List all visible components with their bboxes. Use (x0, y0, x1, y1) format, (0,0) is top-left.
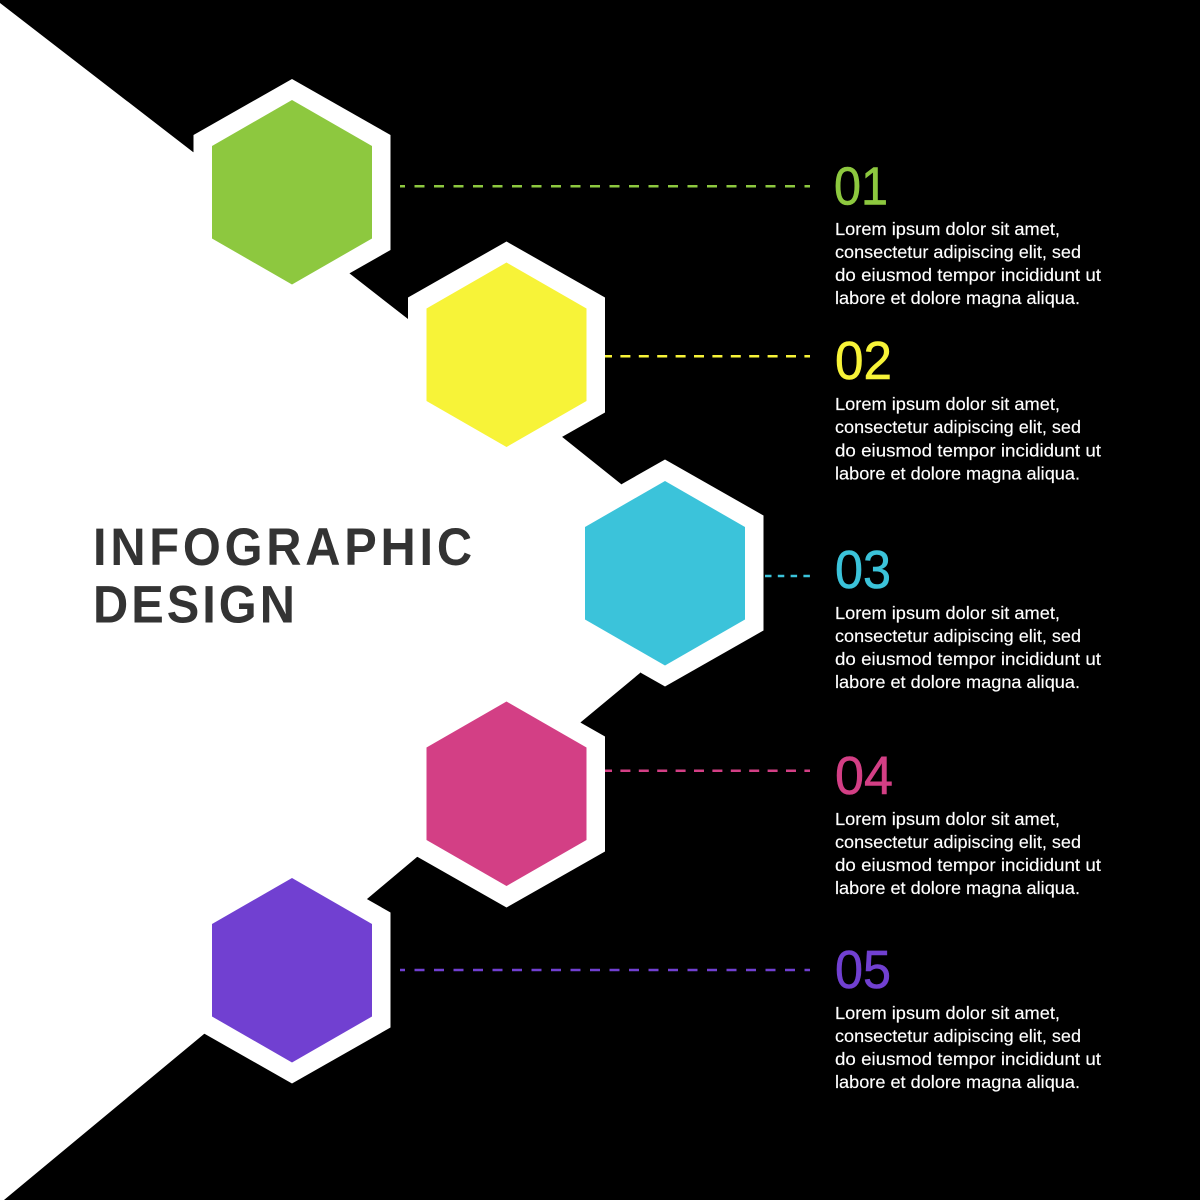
item 01 text: labore et dolore magna aliqua. (835, 288, 1080, 308)
connector line 5 (400, 969, 810, 971)
hexagon 4: pink (426, 702, 586, 886)
item 01 text: do eiusmod tempor incididunt ut (835, 265, 1101, 285)
title (93, 517, 472, 634)
item 04 text: 04 (835, 746, 893, 806)
item 04 text: Lorem ipsum dolor sit amet, (835, 809, 1060, 829)
item 03 text: labore et dolore magna aliqua. (835, 672, 1080, 692)
item 02 text: consectetur adipiscing elit, sed (835, 417, 1081, 437)
item 04 text: do eiusmod tempor incididunt ut (835, 855, 1101, 875)
hexagon 2: yellow (426, 262, 586, 447)
hexagon 5: purple (212, 878, 372, 1062)
item 01 text: 01 (834, 156, 888, 216)
item 02 text: Lorem ipsum dolor sit amet, (835, 394, 1060, 414)
item 04 text: labore et dolore magna aliqua. (835, 878, 1080, 898)
title: DESIGN (93, 575, 295, 634)
item 03 text: Lorem ipsum dolor sit amet, (835, 603, 1060, 623)
item 02 text: 02 (835, 331, 892, 391)
item 05 text: consectetur adipiscing elit, sed (835, 1026, 1081, 1046)
item 04 text: consectetur adipiscing elit, sed (835, 832, 1081, 852)
item 02 text: labore et dolore magna aliqua. (835, 464, 1080, 484)
connector line 1 (400, 185, 810, 188)
white background panel (0, 3, 764, 1200)
connector line 4 (605, 770, 810, 772)
item 05 text (835, 940, 1101, 1092)
item 04 text (835, 746, 1101, 898)
connector line 2 (605, 355, 810, 358)
title: INFOGRAPHIC (93, 517, 472, 576)
item 03 text: consectetur adipiscing elit, sed (835, 626, 1081, 646)
item 05 text: Lorem ipsum dolor sit amet, (835, 1003, 1060, 1023)
item 05 text: do eiusmod tempor incididunt ut (835, 1049, 1101, 1069)
item 03 text (835, 540, 1101, 692)
item 01 text: consectetur adipiscing elit, sed (835, 242, 1081, 262)
item 02 text: do eiusmod tempor incididunt ut (835, 440, 1101, 460)
item 02 text (835, 331, 1101, 484)
hexagon 1: green (212, 100, 372, 284)
item 05 text: labore et dolore magna aliqua. (835, 1072, 1080, 1092)
item 01 text (834, 156, 1101, 308)
hexagon 3: cyan (585, 481, 745, 666)
item 03 text: do eiusmod tempor incididunt ut (835, 649, 1101, 669)
connector line 3 (765, 575, 810, 577)
item 01 text: Lorem ipsum dolor sit amet, (835, 219, 1060, 239)
item 05 text: 05 (835, 940, 891, 1000)
item 03 text: 03 (835, 540, 891, 600)
